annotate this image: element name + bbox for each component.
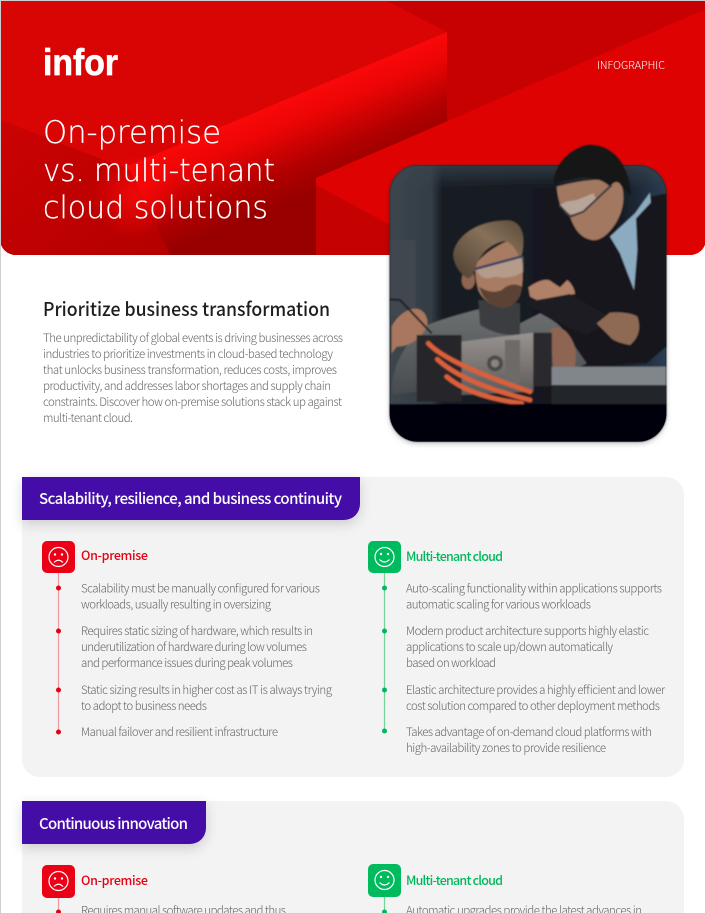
icon: happy face [368,864,401,897]
list: applications to scale up/down automatically [406,639,613,655]
timeline point [382,910,387,914]
timeline points [56,586,61,734]
cables [428,343,530,403]
title [43,115,275,226]
list: underutilization of hardware during low volumes [81,639,307,655]
list [81,580,333,740]
title: vs. multi-tenant [43,153,275,189]
hands [392,309,427,353]
title: On-premise [43,115,221,151]
list: Scalability must be manually configured for various [81,580,320,596]
icon: happy face [368,541,401,573]
list: Auto-scaling functionality within applications supports [406,580,662,596]
list [406,580,666,756]
list: cost solution compared to other deployment methods [406,698,660,714]
list: automatic scaling for various workloads [406,596,591,612]
list: Modern product architecture supports highly elastic [406,623,649,639]
sweater [392,309,587,395]
list: Requires static sizing of hardware, which results in [81,623,313,639]
list: based on workload [406,655,496,671]
intro text [43,330,343,426]
tab heading: scalability: Scalability, resilience, and business continuity [39,488,342,509]
subheading: multi-tenant cloud: Multi-tenant cloud [406,546,503,565]
face [462,271,475,289]
timeline points [382,586,387,734]
list: high-availability zones to provide resilience [406,740,606,756]
list: Manual failover and resilient infrastructure [81,724,278,740]
heading: prioritize: Prioritize business transformation [43,295,330,322]
logo: infor [43,42,118,83]
list: to adopt to business needs [81,698,207,714]
column: multi-tenant cloud [368,864,642,914]
engine [417,335,462,402]
list: Static sizing results in higher cost as IT is always trying [81,682,333,698]
photo: two engineers with engine [390,145,666,442]
intro text: constraints. Discover how on-premise solutions stack up against [43,394,342,410]
intro text: industries to prioritize investments in cloud-based technology [43,346,333,362]
subheading: multi-tenant cloud: Multi-tenant cloud [406,870,503,889]
list: Elastic architecture provides a highly efficient and lower [406,682,666,698]
subheading: on-premise: On-premise [81,545,148,564]
label: infographic: INFOGRAPHIC [597,58,665,73]
header banner [0,0,706,255]
subheading: on-premise: On-premise [81,870,148,889]
intro text: The unpredictability of global events is driving businesses across [43,330,343,346]
column: on-premise [42,541,333,740]
timeline point [56,910,61,914]
tab heading: continuous innovation [22,801,206,844]
icon: sad face [42,541,75,573]
tab heading: scalability [22,477,360,520]
panel: continuous innovation [22,801,684,914]
head overflowing frame [611,183,623,204]
jacket [619,193,668,364]
panel: scalability [22,477,684,777]
title: cloud solutions [43,190,268,226]
column: multi-tenant cloud [368,541,666,756]
tab heading: continuous innovation: Continuous innovation [39,813,188,834]
icon: sad face [42,865,75,898]
intro text: multi-tenant cloud. [43,410,133,426]
column: on-premise [42,865,286,914]
list: workloads, usually resulting in oversizing [81,596,272,612]
intro text: that unlocks business transformation, reduces costs, improves [43,362,337,378]
list: Takes advantage of on-demand cloud platforms with [406,724,652,740]
machine [552,367,666,386]
intro text: productivity, and addresses labor shortages and supply chain [43,378,331,394]
list: and performance issues during peak volumes [81,655,293,671]
